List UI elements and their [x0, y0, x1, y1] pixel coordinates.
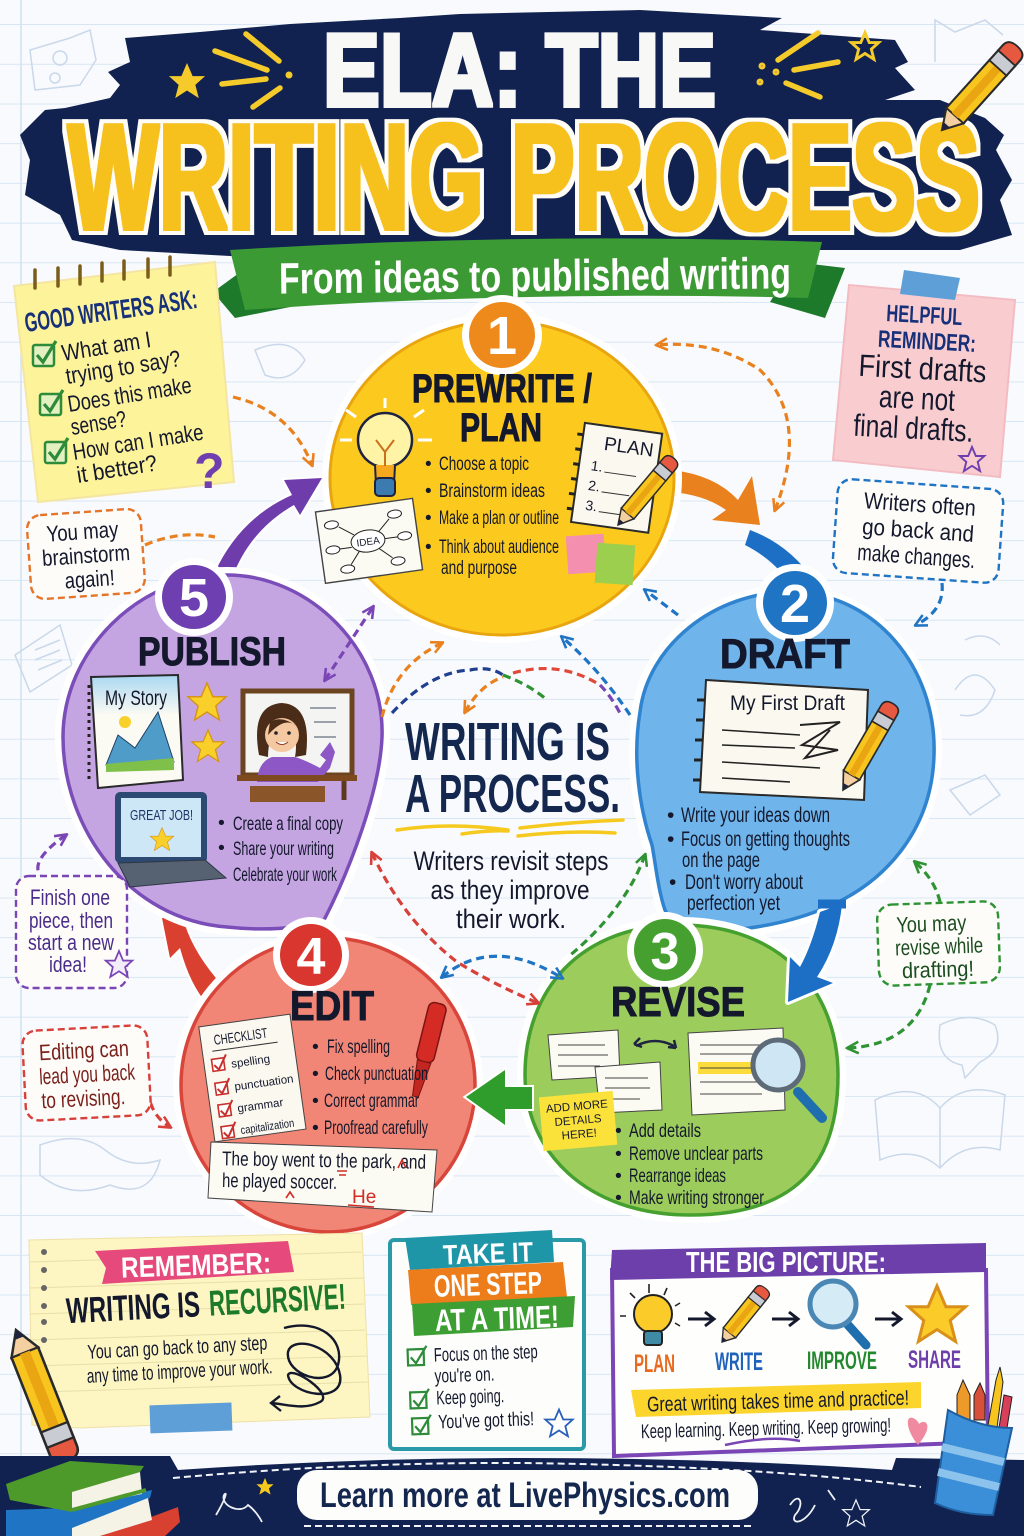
bullets: Celebrate your work: [233, 864, 337, 886]
sticky note: DETAILS: [554, 1113, 602, 1129]
note: good writers ask: [14, 257, 234, 502]
checklist: Focus on the step: [433, 1341, 538, 1367]
tape: [149, 1403, 232, 1433]
bullets: [615, 1120, 764, 1209]
question list: [60, 326, 205, 488]
callout: writers often go back: go back and: [861, 513, 975, 547]
checklist: You've got this!: [438, 1408, 534, 1433]
panel: 2 draft: [629, 564, 942, 941]
icon: laptop: GREAT JOB!: [130, 807, 193, 824]
heading line 1: ELA: THE: [323, 13, 716, 129]
panel: 3 revise: [517, 912, 846, 1223]
step number 2: 2: [780, 574, 810, 634]
bullets: Make a plan or outline: [439, 508, 559, 529]
reminder heading: HELPFUL: [886, 300, 963, 331]
heading: [412, 367, 592, 450]
callout: finish one piece: Finish one: [30, 885, 110, 910]
purple header: THE BIG PICTURE:: [686, 1247, 886, 1279]
panel: remember: [29, 1233, 370, 1433]
icon: story book: [89, 675, 183, 788]
arrow 4 to 5: [162, 918, 222, 1005]
remember text: any time to improve your work.: [86, 1356, 273, 1388]
swap arrow: [634, 1038, 676, 1048]
callout: finish one piece: idea!: [49, 952, 87, 977]
step number 5: [155, 558, 233, 636]
recursive heading: [65, 1276, 347, 1331]
callout: you may revise while drafting: You may: [896, 910, 967, 937]
callout: you may revise while drafting: drafting!: [902, 956, 974, 983]
faint background doodles: [15, 20, 1005, 1191]
bullets: Focus on getting thoughts: [681, 828, 850, 851]
bullets: •: [312, 1090, 319, 1112]
subtitle text: From ideas to published writing: [279, 249, 791, 304]
bullets: •: [667, 804, 674, 827]
icon: pencil: [612, 453, 680, 530]
recursive heading: RECURSIVE!: [208, 1276, 347, 1324]
panel: 1 prewrite / plan: [315, 295, 682, 643]
step number 2: [756, 564, 834, 642]
checklist: punctuation: [234, 1073, 294, 1093]
arrow 3 to 4: [466, 1070, 532, 1125]
footer doodles: [216, 1490, 869, 1526]
step labels: IMPROVE: [807, 1347, 877, 1375]
website pill: Learn more at LivePhysics.com: [320, 1476, 730, 1515]
heart icon: [908, 1418, 927, 1445]
pencil icon: [933, 39, 1024, 138]
brush stroke background: [20, 10, 1012, 256]
heading: EDIT: [290, 982, 374, 1029]
checklist: you're on.: [434, 1363, 495, 1388]
icon: draft notebook: My First Draft: [730, 692, 845, 715]
heading: REVISE: [611, 978, 745, 1025]
step labels: [634, 1346, 961, 1378]
yellow underline: [397, 820, 623, 836]
bullets: Don't worry about: [685, 871, 803, 894]
icon: stars: [188, 683, 226, 761]
question mark: ?: [194, 443, 225, 499]
green banner: AT A TIME!: [434, 1299, 560, 1338]
recursive heading: WRITING IS: [65, 1283, 201, 1331]
central heading: WRITING IS: [405, 712, 610, 772]
bullets: •: [312, 1117, 319, 1139]
starbursts right: [758, 33, 879, 97]
note heading: GOOD WRITERS ASK:: [23, 284, 199, 338]
question list: it better?: [75, 450, 159, 488]
bullets: Share your writing: [233, 838, 334, 860]
reminder text: First drafts: [858, 348, 987, 389]
arrow 1 to 2: [672, 470, 815, 590]
bullets: Choose a topic: [439, 454, 529, 475]
callout: you may brainstorm again: brainstorm: [41, 540, 131, 571]
example sentence strip: [208, 1142, 437, 1212]
bullets: Check punctuation: [325, 1063, 428, 1085]
icon: book stack: [6, 1461, 180, 1536]
bullets: •: [615, 1165, 622, 1187]
checklist: CHECKLIST: [213, 1025, 269, 1048]
bullets: perfection yet: [687, 892, 780, 915]
bullets: •: [425, 481, 432, 502]
remember text: You can go back to any step: [87, 1332, 268, 1364]
checklist: [407, 1341, 541, 1434]
sticky note: [539, 1091, 617, 1151]
panel: 4 edit: [173, 917, 483, 1240]
icon: star: [908, 1286, 966, 1342]
process arrows behind panels: [162, 470, 815, 1005]
sticky note: HERE!: [561, 1127, 597, 1142]
icon: highlighted page: [688, 1028, 785, 1115]
process arrows over panels: [466, 904, 846, 1125]
callout: writers often go back: make changes.: [857, 539, 976, 573]
website pill: [297, 1470, 758, 1520]
heading: PLAN: [460, 406, 542, 450]
bullets: Proofread carefully: [324, 1117, 428, 1139]
icon: idea map: [315, 498, 423, 583]
bullets: Add details: [629, 1120, 701, 1142]
step number 1: 1: [487, 306, 517, 366]
footer star: [256, 1478, 274, 1495]
heading: PUBLISH: [138, 630, 286, 674]
bullets: •: [312, 1036, 319, 1058]
callout: finish one piece: start a new: [28, 930, 114, 955]
icon: plan notebook: 1.: [590, 457, 604, 475]
note: helpful reminder: REMINDER:: [877, 326, 977, 358]
remember banner: REMEMBER:: [121, 1247, 272, 1285]
central text: their work.: [456, 904, 566, 934]
central text: Writers revisit steps: [414, 846, 608, 876]
bullets: •: [615, 1120, 622, 1142]
icon: pencil: [835, 699, 901, 795]
step labels: WRITE: [715, 1348, 763, 1376]
question list: Does this make: [66, 372, 193, 417]
spiral rings: [35, 257, 170, 288]
heading: PREWRITE /: [412, 367, 592, 411]
central text: [414, 846, 608, 934]
icon: pencil: [716, 1283, 772, 1347]
bullets: Create a final copy: [233, 813, 343, 835]
icon: plan notebook: PLAN: [603, 434, 655, 462]
bullets: •: [667, 828, 674, 851]
yellow highlight: Great writing takes time and practice!: [647, 1387, 909, 1416]
callout: editing can lead back: lead you back: [39, 1059, 136, 1089]
icon: light bulb: [340, 398, 432, 496]
icon: plan notebook: 3.: [584, 497, 598, 514]
sticky note: ADD MORE: [545, 1098, 609, 1116]
bullets: Rearrange ideas: [629, 1165, 726, 1187]
checklist: grammar: [237, 1097, 284, 1115]
example sentence strip: he played soccer.: [222, 1170, 337, 1194]
central heading: A PROCESS.: [405, 764, 620, 824]
callout: editing can lead back: [22, 1025, 151, 1121]
callout: finish one piece: [16, 876, 132, 988]
step number 3: 3: [651, 923, 679, 981]
orange banner: [408, 1262, 567, 1305]
star icon: [106, 951, 132, 977]
bullets: [667, 804, 850, 915]
icon: idea map: IDEA: [356, 535, 381, 550]
bullets: Think about audience: [439, 537, 559, 558]
callout: you may brainstorm again: again!: [64, 565, 116, 594]
icon: left pencil: [3, 1325, 81, 1466]
footer band: [0, 1456, 1024, 1536]
bullets: [425, 454, 559, 579]
icon: presentation board and author: [237, 691, 357, 802]
bullets: •: [425, 537, 432, 558]
central text: as they improve: [430, 875, 590, 905]
checklist: spelling: [231, 1053, 271, 1071]
question list: How can I make: [71, 419, 205, 465]
callout: writers often go back: Writers often: [863, 487, 977, 521]
bullets: •: [218, 812, 225, 834]
callout: you may revise while drafting: revise while: [895, 932, 984, 960]
subtitle ribbon: [213, 238, 845, 318]
bullets: •: [425, 454, 432, 475]
central message: [397, 712, 623, 934]
icon: red pen: [407, 1001, 447, 1099]
reminder text: are not: [878, 379, 956, 418]
callout: you may brainstorm again: You may: [46, 517, 120, 547]
icon: magnifier: [810, 1281, 866, 1345]
icon: plan notebook: [565, 422, 662, 533]
step number 1: [462, 295, 542, 375]
icon: draft notebook: [693, 680, 868, 800]
star icon: [545, 1410, 573, 1436]
bullets: Write your ideas down: [681, 804, 830, 827]
spiral arrow: [271, 1326, 340, 1411]
step number 4: [273, 917, 349, 993]
closing line: Keep learning. Keep writing. Keep growing!: [641, 1415, 891, 1443]
starbursts left: [169, 34, 292, 107]
callout: writers often go back: [832, 478, 1004, 584]
bullets: on the page: [682, 849, 760, 872]
callout: editing can lead back: Editing can: [38, 1036, 129, 1065]
icon: laptop: [115, 792, 226, 887]
central heading: [405, 712, 620, 824]
icon: story book: My Story: [105, 687, 167, 710]
panel: take it one step at a time: [390, 1230, 584, 1449]
bullets: •: [615, 1143, 622, 1165]
callout: you may brainstorm again: [26, 508, 146, 600]
icon: draft sheets: [548, 1030, 662, 1113]
checklist: capitalization: [240, 1118, 295, 1137]
title banner: [20, 10, 1024, 261]
icon: magnifier: [753, 1040, 822, 1118]
bullets: •: [615, 1187, 622, 1209]
panel: 5 publish: [55, 558, 390, 937]
arrow 5 to 1: [215, 478, 322, 578]
bullets: [218, 812, 343, 886]
panel: the big picture: [610, 1243, 988, 1456]
step number 4: 4: [297, 928, 326, 986]
teal banner: TAKE IT: [442, 1236, 533, 1271]
arrow 2 to 3: [788, 904, 846, 1002]
question list: sense?: [69, 405, 128, 440]
bullets: and purpose: [441, 558, 517, 579]
heading: DRAFT: [720, 630, 850, 677]
bullets: Make writing stronger: [629, 1187, 764, 1209]
icon: bulb: [620, 1284, 680, 1345]
bullets: •: [425, 508, 432, 529]
checklist: [199, 1014, 306, 1142]
closing line: [641, 1415, 891, 1445]
bullets: Brainstorm ideas: [439, 481, 545, 502]
bullets: Fix spelling: [327, 1036, 390, 1058]
reminder text: [853, 348, 987, 449]
question list: trying to say?: [64, 345, 182, 389]
purple header: [610, 1243, 986, 1280]
bullets: Remove unclear parts: [629, 1143, 763, 1165]
star icon: [960, 447, 984, 471]
step labels: SHARE: [908, 1346, 961, 1374]
bullets: •: [312, 1063, 319, 1085]
bullets: [312, 1036, 428, 1139]
example sentence strip: He: [352, 1187, 376, 1208]
bullets: •: [669, 871, 676, 894]
icon: sticky notes: [566, 534, 635, 585]
teal banner: [405, 1230, 554, 1271]
dashed connector arrows: [38, 344, 942, 1127]
callout: you may revise while drafting: [877, 901, 1000, 986]
checklist: Keep going.: [436, 1385, 505, 1410]
remember text: [85, 1332, 273, 1388]
reminder text: final drafts.: [853, 408, 974, 449]
icon: arrows: [688, 1312, 901, 1326]
icon: plan notebook: 2.: [587, 477, 601, 495]
callout: editing can lead back: to revising.: [41, 1084, 126, 1113]
step number 5: 5: [179, 568, 209, 628]
question list: What am I: [60, 326, 153, 366]
step number 3: [627, 912, 703, 988]
icon: pencil cup: [935, 1367, 1012, 1515]
note: helpful reminder: [833, 270, 1015, 477]
orange banner: ONE STEP: [433, 1265, 542, 1304]
callout: finish one piece: piece, then: [29, 908, 113, 933]
example sentence strip: The boy went to the park, and: [222, 1148, 426, 1174]
bullets: Correct grammar: [324, 1090, 419, 1112]
step labels: PLAN: [634, 1350, 675, 1378]
bullets: •: [218, 837, 225, 859]
